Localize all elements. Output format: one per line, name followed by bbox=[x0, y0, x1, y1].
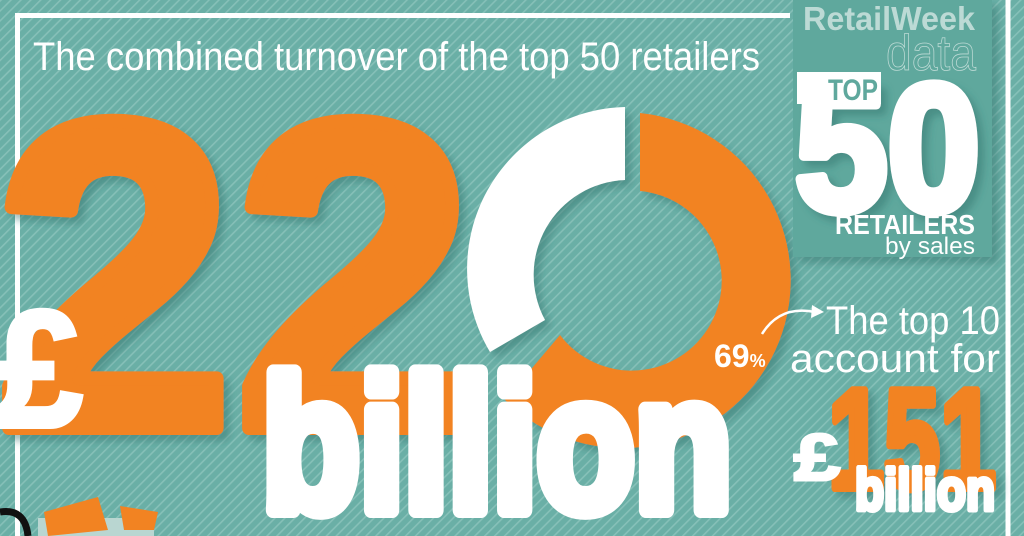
brand: TOP bbox=[797, 72, 881, 107]
brand box: by sales bbox=[885, 233, 975, 260]
£151 billion: billion bbox=[855, 458, 995, 523]
brand: 50: 50 bbox=[795, 48, 980, 249]
big number 220: 22 bbox=[0, 31, 474, 522]
brand: TOP: TOP bbox=[828, 74, 878, 107]
brand: RetailWeek: RetailWeek bbox=[803, 0, 976, 37]
brand box bbox=[793, 0, 992, 260]
label 69%: 69% bbox=[714, 338, 766, 374]
brand: data: data bbox=[886, 25, 976, 81]
right text: The top 10 account for: account for bbox=[790, 337, 1000, 381]
donut: white 31% segment bbox=[467, 107, 625, 352]
arrow bbox=[762, 305, 824, 334]
donut: orange 69% segment bbox=[505, 113, 791, 448]
£151 billion: £ bbox=[794, 420, 840, 494]
right text: The top 10 account for bbox=[790, 299, 1000, 381]
brand: RETAILERS by sales: RETAILERS bbox=[835, 209, 975, 240]
right text: The top 10 account for: The top 10 bbox=[826, 299, 1000, 343]
donut chart bbox=[467, 107, 791, 448]
title: The combined turnover of the top 50 retailers bbox=[33, 35, 760, 79]
bottom-left decoration bbox=[0, 497, 158, 536]
